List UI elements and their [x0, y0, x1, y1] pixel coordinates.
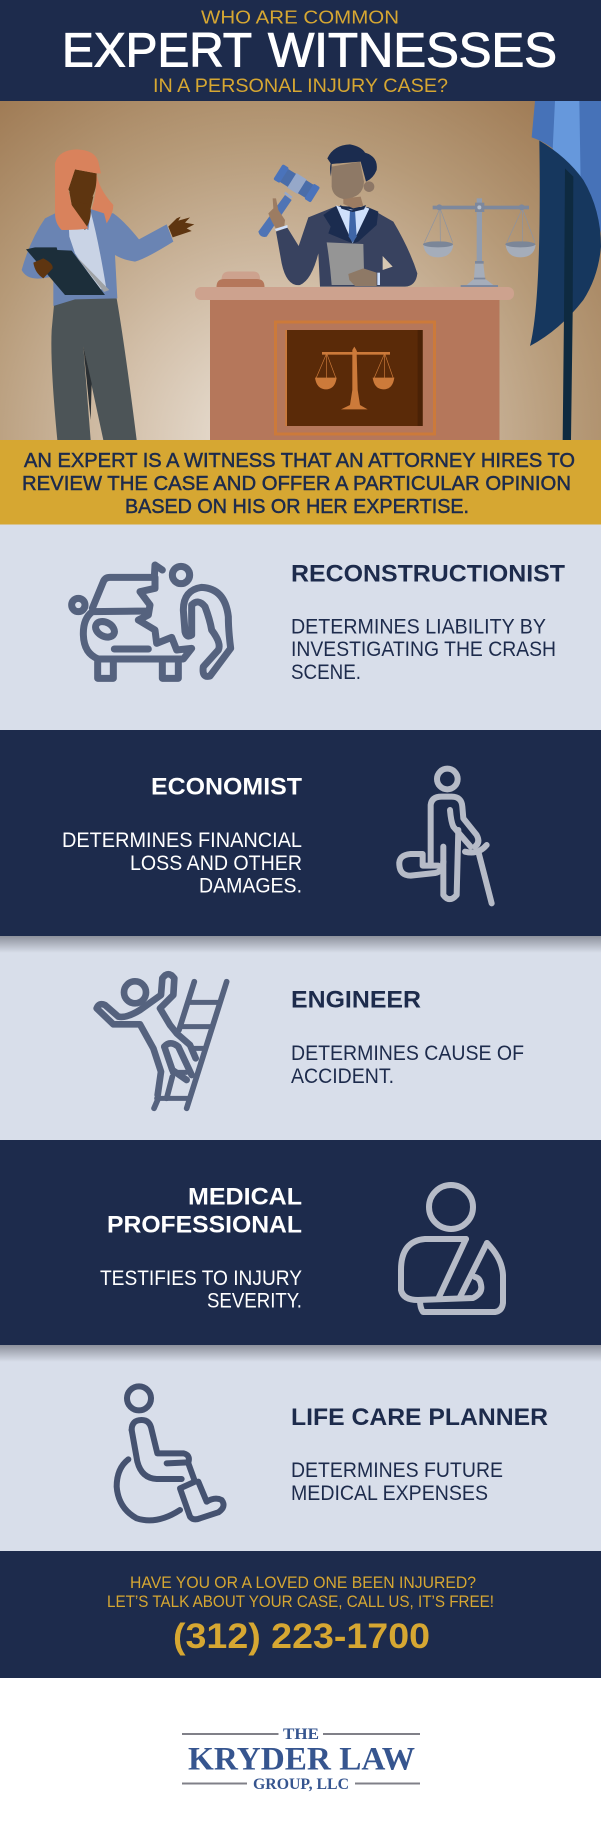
description: [291, 1042, 524, 1088]
small sound block: [216, 272, 264, 287]
call to action text: HAVE YOU OR A LOVED ONE BEEN INJURED?: [130, 1573, 476, 1592]
panel: medical professional: [0, 1140, 601, 1345]
icon: person in wheelchair: [117, 1386, 224, 1520]
description: DETERMINES CAUSE OF: [291, 1042, 524, 1065]
icon: car crash with injured person: [72, 565, 231, 678]
title: expert witnesses: WITNESSES: [268, 24, 557, 78]
description: DETERMINES LIABILITY BY: [291, 615, 546, 638]
intro text: AN EXPERT IS A WITNESS THAT AN ATTORNEY HIRES TO: [24, 449, 575, 472]
call to action text: LET’S TALK ABOUT YOUR CASE, CALL US, IT’S FREE!: [107, 1592, 494, 1611]
title line: who are common: WHO ARE COMMON: [201, 8, 399, 28]
description: INVESTIGATING THE CRASH: [291, 638, 556, 661]
description: [291, 1459, 503, 1505]
description: MEDICAL EXPENSES: [291, 1482, 488, 1505]
intro text: REVIEW THE CASE AND OFFER A PARTICULAR OPINION: [22, 472, 571, 495]
title: expert witnesses: [62, 24, 557, 78]
judge with gavel: [258, 144, 417, 287]
woman expert witness: [22, 149, 194, 440]
intro banner: [0, 440, 601, 524]
intro text: [22, 449, 575, 518]
flag and pole: [530, 101, 601, 440]
icon: person falling from ladder: [97, 974, 227, 1108]
heading: RECONSTRUCTIONIST: [291, 561, 565, 588]
description: [62, 829, 302, 898]
logo: the kryder law group: GROUP, LLC: [253, 1776, 349, 1793]
description: DAMAGES.: [199, 875, 302, 898]
logo: the kryder law group: THE: [283, 1726, 319, 1743]
icon: person with arm sling: [401, 1185, 503, 1312]
header panel: [0, 0, 601, 101]
right-hand scales of justice: [423, 198, 536, 287]
description: DETERMINES FINANCIAL: [62, 829, 302, 852]
heading: PROFESSIONAL: [107, 1211, 302, 1238]
description: SEVERITY.: [207, 1290, 302, 1313]
logo: the kryder law group: KRYDER LAW: [188, 1741, 415, 1777]
gavel: [258, 164, 320, 237]
phone number: (312) 223-1700: [173, 1617, 430, 1656]
heading: LIFE CARE PLANNER: [291, 1404, 548, 1431]
panel: engineer: [0, 936, 601, 1140]
call to action panel: [0, 1551, 601, 1678]
judge's bench: [195, 287, 514, 440]
description: ACCIDENT.: [291, 1065, 394, 1088]
call to action text: [107, 1573, 494, 1611]
bench emblem: scales: [285, 330, 423, 426]
icon: person with crutch and leg cast: [399, 769, 492, 903]
description: SCENE.: [291, 661, 361, 684]
heading: ECONOMIST: [151, 773, 302, 800]
description: DETERMINES FUTURE: [291, 1459, 503, 1482]
heading: [107, 1183, 302, 1238]
panel: life care planner: [0, 1345, 601, 1551]
title line: in a personal injury case: IN A PERSONAL INJURY CASE?: [153, 76, 448, 97]
intro text: BASED ON HIS OR HER EXPERTISE.: [125, 495, 469, 518]
description: [100, 1267, 302, 1313]
heading: MEDICAL: [188, 1183, 302, 1210]
panel: economist: [0, 730, 601, 936]
description: [291, 615, 556, 684]
logo: the kryder law group: [182, 1726, 420, 1793]
heading: ENGINEER: [291, 987, 421, 1014]
title: expert witnesses: EXPERT: [62, 24, 252, 78]
courtroom illustration: [0, 101, 601, 440]
description: LOSS AND OTHER: [130, 852, 302, 875]
panel: reconstructionist: [0, 524, 601, 730]
description: TESTIFIES TO INJURY: [100, 1267, 302, 1290]
